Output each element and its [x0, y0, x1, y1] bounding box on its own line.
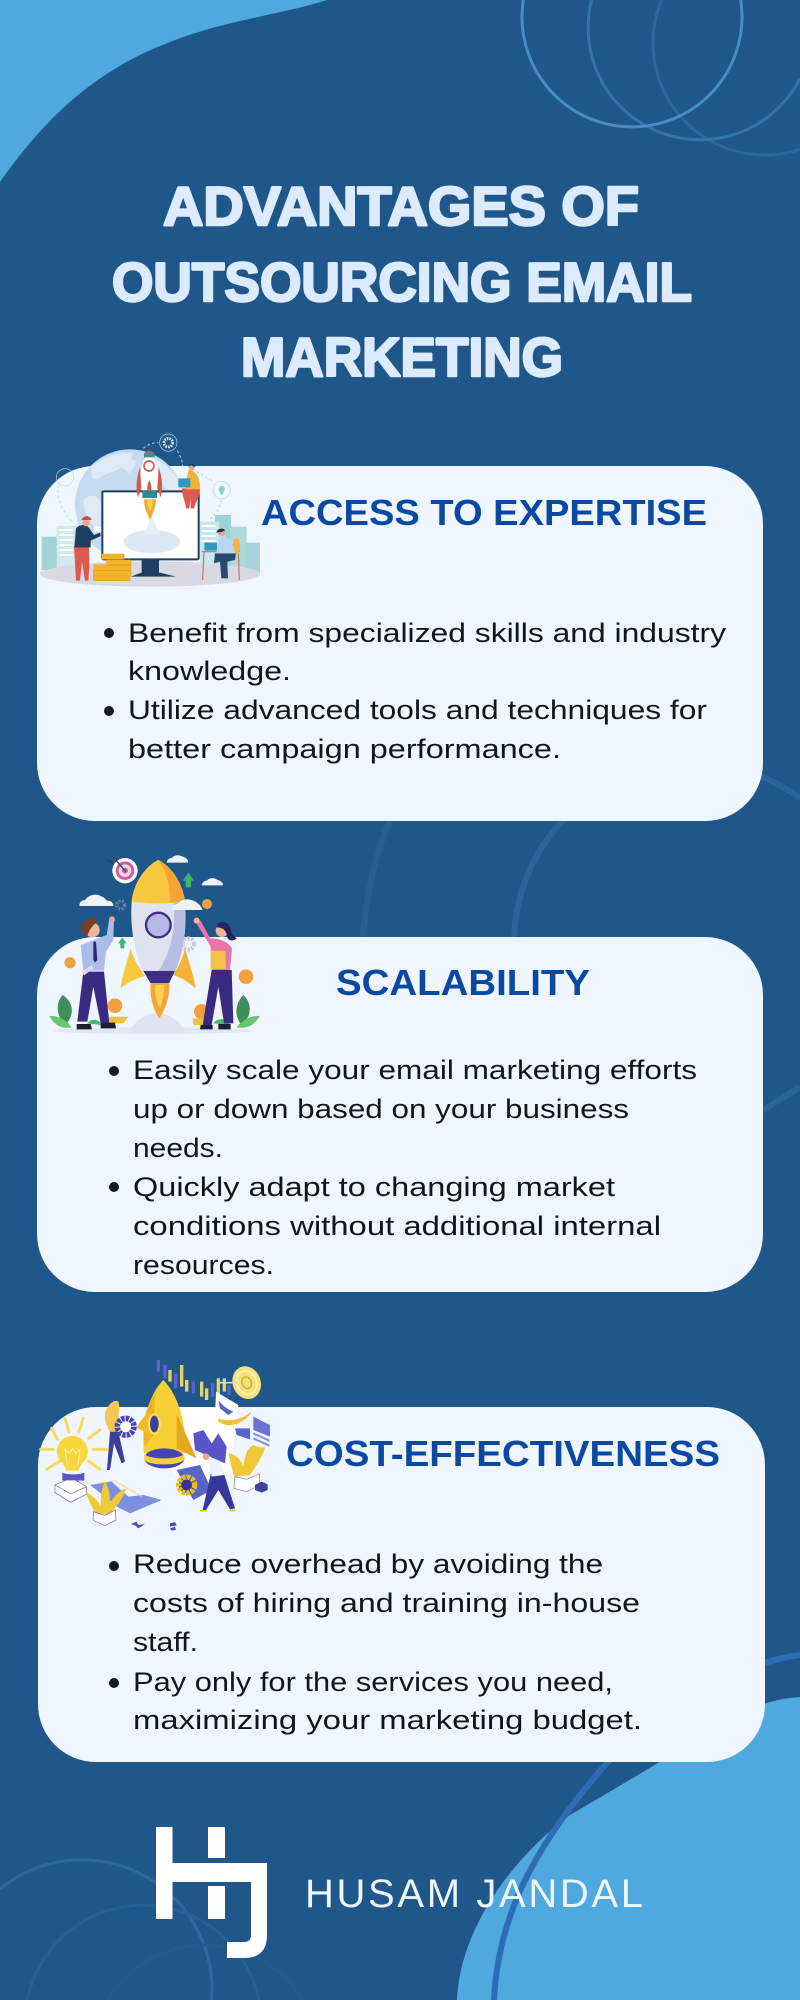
- mid-page arcs: [363, 763, 800, 1110]
- gears: [117, 901, 125, 909]
- title: MARKETING: [241, 326, 563, 388]
- heading: COST-EFFECTIVENESS: [286, 1433, 720, 1474]
- woman: [203, 970, 233, 1025]
- bulb icon: [213, 481, 230, 499]
- target: [112, 858, 138, 883]
- small diamonds: [131, 1522, 145, 1528]
- coin stacks: [93, 554, 131, 581]
- panel: access to expertise: [37, 434, 763, 821]
- bullet list: Quickly adapt to changing market: [133, 1172, 616, 1202]
- title: [112, 175, 692, 388]
- left person: [74, 546, 89, 581]
- bullet list: [104, 618, 727, 764]
- man: [77, 972, 109, 1023]
- wordmark: HUSAM JANDAL: [305, 1872, 643, 1916]
- bullet list: resources.: [133, 1250, 274, 1280]
- panel: cost-effectiveness: [38, 1360, 765, 1762]
- bottom-right light blue blob: [457, 1697, 800, 2000]
- rocket: [143, 1380, 185, 1453]
- rocket: [140, 452, 158, 490]
- gear large and ribbon: [177, 1465, 212, 1500]
- bullet list: up or down based on your business: [133, 1094, 629, 1124]
- bullet list: Reduce overhead by avoiding the: [133, 1549, 603, 1579]
- bullet list: [109, 1055, 697, 1280]
- icon: HJ monogram: [156, 1827, 267, 1958]
- bullet list: conditions without additional internal: [133, 1211, 661, 1241]
- leaves: [58, 995, 250, 1025]
- bullet list: [109, 1549, 642, 1735]
- heading: ACCESS TO EXPERTISE: [261, 492, 707, 533]
- coins: [64, 957, 76, 968]
- bullet list: better campaign performance.: [128, 734, 561, 764]
- bullet list: staff.: [133, 1627, 198, 1657]
- bullet list: Benefit from specialized skills and industry: [128, 618, 727, 648]
- screen panel: [170, 1392, 238, 1490]
- bullet list: knowledge.: [128, 656, 291, 686]
- target: [228, 1362, 266, 1403]
- bullet list: Utilize advanced tools and techniques for: [128, 695, 707, 725]
- bullet list: costs of hiring and training in-house: [133, 1588, 640, 1618]
- logo: HJ mark and wordmark: [156, 1827, 643, 1958]
- light bulb: [41, 1418, 106, 1469]
- bullet list: Easily scale your email marketing efforts: [133, 1055, 697, 1085]
- panel: scalability: [37, 855, 763, 1292]
- title: ADVANTAGES OF: [163, 175, 639, 237]
- bullet list: Pay only for the services you need,: [133, 1667, 613, 1697]
- bullet list: needs.: [133, 1133, 223, 1163]
- top-right ring cluster: [522, 0, 800, 155]
- person with gear: [107, 1432, 125, 1470]
- green arrows: [183, 873, 194, 887]
- bottom-right curved stripe: [494, 1655, 800, 2000]
- top-left light blue blob: [0, 0, 327, 182]
- plant: [228, 1445, 265, 1477]
- title: OUTSOURCING EMAIL: [112, 251, 692, 313]
- heading: SCALABILITY: [336, 962, 590, 1003]
- top right person on monitor: [182, 488, 200, 508]
- rocket: [131, 860, 186, 972]
- illustration: isometric rocket, bulb and charts: [41, 1360, 270, 1531]
- person front: [203, 1470, 235, 1510]
- bullet list: maximizing your marketing budget.: [133, 1705, 642, 1735]
- cloud on rocket: [172, 899, 203, 910]
- candlestick chart: [158, 1360, 229, 1397]
- clouds: [79, 895, 113, 906]
- gear icon: [160, 434, 177, 451]
- plant front: [85, 1482, 127, 1514]
- floor chart: [90, 1482, 162, 1513]
- illustration: team launching rocket: [49, 855, 260, 1034]
- desk person: [202, 552, 240, 580]
- bottom-left rings: [0, 1860, 303, 2000]
- illustration: rocket launch from monitor with team: [40, 434, 260, 587]
